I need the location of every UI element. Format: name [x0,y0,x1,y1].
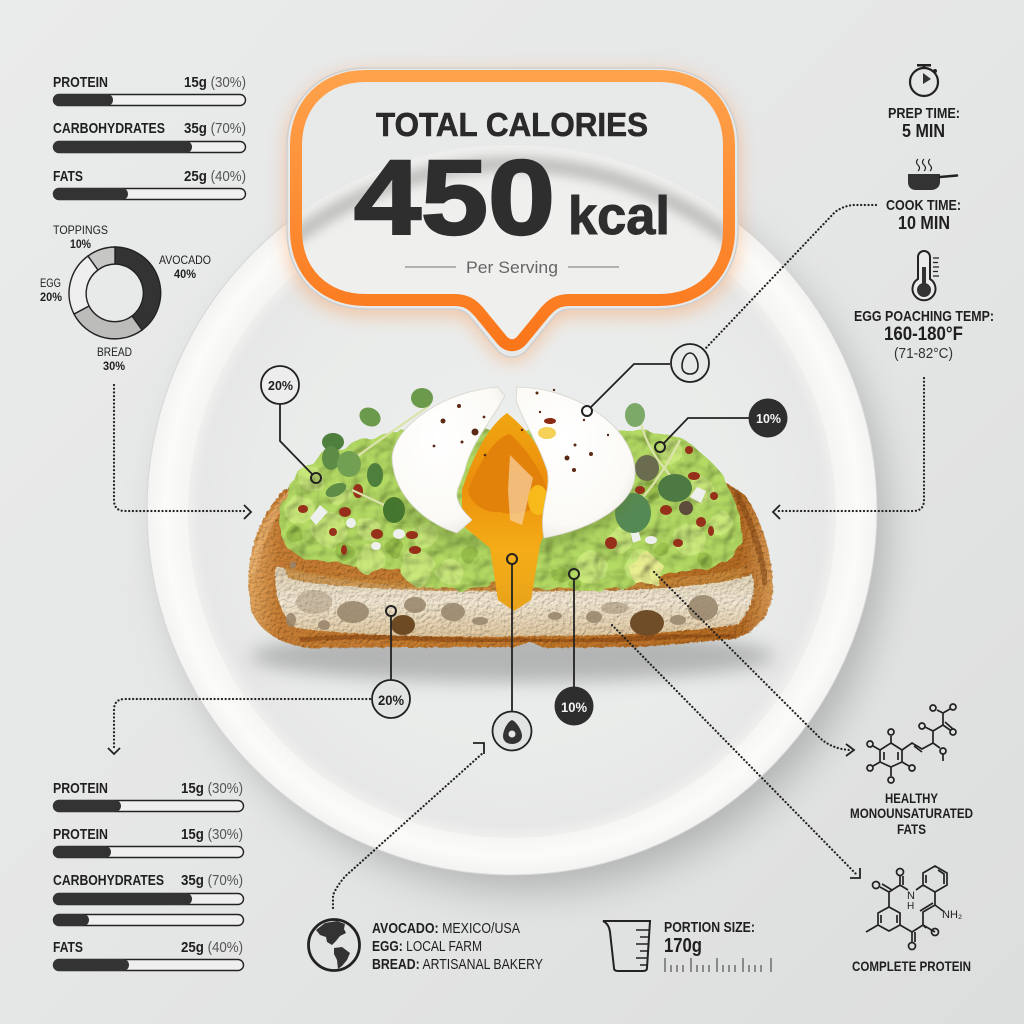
ingredient origins: BREAD: ARTISANAL BAKERY [372,956,543,973]
fats row: FATS [53,168,83,185]
icon: pan [908,159,957,190]
callout: 10% avocado: 10% [561,699,588,715]
donut chart: AVOCADO [159,253,211,267]
egg poaching temperature [854,308,994,362]
callout: egg marker [582,344,709,416]
molecule: complete protein: H [907,901,914,912]
arrow: globe to yolk marker [333,743,484,908]
egg poaching temperature: (71-82°C) [894,345,953,362]
arrow: right column to toast [773,378,924,519]
cook time: COOK TIME: [886,197,961,214]
mashed avocado [279,430,742,591]
molecule: complete protein: NH₂ [942,909,962,921]
molecule: complete protein [866,866,962,950]
callout: 10% microgreens: 10% [756,411,781,426]
donut chart: TOPPINGS [53,223,108,237]
cook time [886,197,961,233]
fats row: FATS [53,939,83,956]
protein row two: PROTEIN [53,826,108,843]
microgreens [322,388,693,533]
donut chart: BREAD [97,345,132,359]
label: healthy fats: FATS [897,821,926,837]
molecule: complete protein: N [907,890,915,902]
callout: 20% bread: 20% [378,692,405,708]
fats row [53,939,244,971]
label: healthy fats [850,790,973,837]
protein row [53,74,246,106]
carbohydrates row [53,120,246,153]
toast with avocado and egg [248,387,773,648]
poached egg [392,387,635,611]
protein row two: 15g (30%) [181,826,243,843]
donut chart: 30% [103,359,125,373]
protein row one: PROTEIN [53,780,108,797]
callout: 10% microgreens [655,398,788,452]
ingredient origins [372,920,543,973]
bubble glow [296,82,729,351]
ingredient origins: EGG: LOCAL FARM [372,938,482,955]
prep time: PREP TIME: [888,105,960,122]
arrow: avocado to fats molecule [654,572,854,756]
unlabelled bar [53,914,244,926]
donut chart [40,223,211,373]
label: healthy fats: HEALTHY [885,790,939,806]
portion size: 170g [664,935,702,957]
carbohydrates row: CARBOHYDRATES [53,120,165,137]
sea salt flakes [310,487,706,550]
red pepper flakes [298,446,718,555]
donut chart: 20% [40,290,62,304]
plate [147,145,886,890]
protein row one: 15g (30%) [181,780,243,797]
callout: yolk drop [492,554,532,750]
cook time: 10 MIN [898,213,950,233]
callout: 20% avocado: 20% [268,378,293,393]
icon: globe [308,920,360,970]
calorie unit: kcal [568,186,670,246]
fats row [53,168,246,200]
fats row: 25g (40%) [184,168,246,185]
egg poaching temperature: EGG POACHING TEMP: [854,308,994,325]
label: healthy fats: MONOUNSATURATED [850,805,973,821]
heading: TOTAL CALORIES [376,106,648,143]
label: complete protein: COMPLETE PROTEIN [852,958,971,974]
molecule: monounsaturated fat [867,704,956,783]
dotted line: cook time to egg icon [706,205,876,348]
donut chart: 40% [174,267,196,281]
prep time [888,105,960,141]
carbohydrates row: 35g (70%) [184,120,246,137]
per serving: Per Serving [466,258,558,277]
arrow: donut to toast [114,385,251,519]
callout: 20% avocado [261,366,321,483]
portion size: PORTION SIZE: [664,919,755,936]
donut chart: 10% [70,237,91,251]
carbohydrates row: 35g (70%) [181,872,243,889]
bread slice [248,482,773,648]
icon: thermometer [912,251,939,300]
nutrition bars: bottom [53,780,244,971]
egg poaching temperature: 160-180°F [884,324,963,345]
calorie value: 450 [354,139,555,257]
protein row one [53,780,244,812]
prep time: 5 MIN [902,121,945,141]
protein row two [53,826,244,858]
fats row: 25g (40%) [181,939,243,956]
arrow: bread to protein molecule [612,625,860,878]
callout: 20% bread [372,606,410,718]
protein row: PROTEIN [53,74,108,91]
nutrition bars: top [53,74,246,200]
donut chart: EGG [40,276,61,290]
arrow: bread to lower bars [108,699,370,754]
carbohydrates row [53,872,244,905]
icon: measuring cup [603,921,650,971]
icon: stopwatch [910,64,938,96]
ingredient origins: AVOCADO: MEXICO/USA [372,920,520,937]
carbohydrates row: CARBOHYDRATES [53,872,164,889]
protein row: 15g (30%) [184,74,246,91]
callout: 10% avocado [554,569,594,726]
callout: total calories [286,67,739,358]
portion size [664,919,771,972]
